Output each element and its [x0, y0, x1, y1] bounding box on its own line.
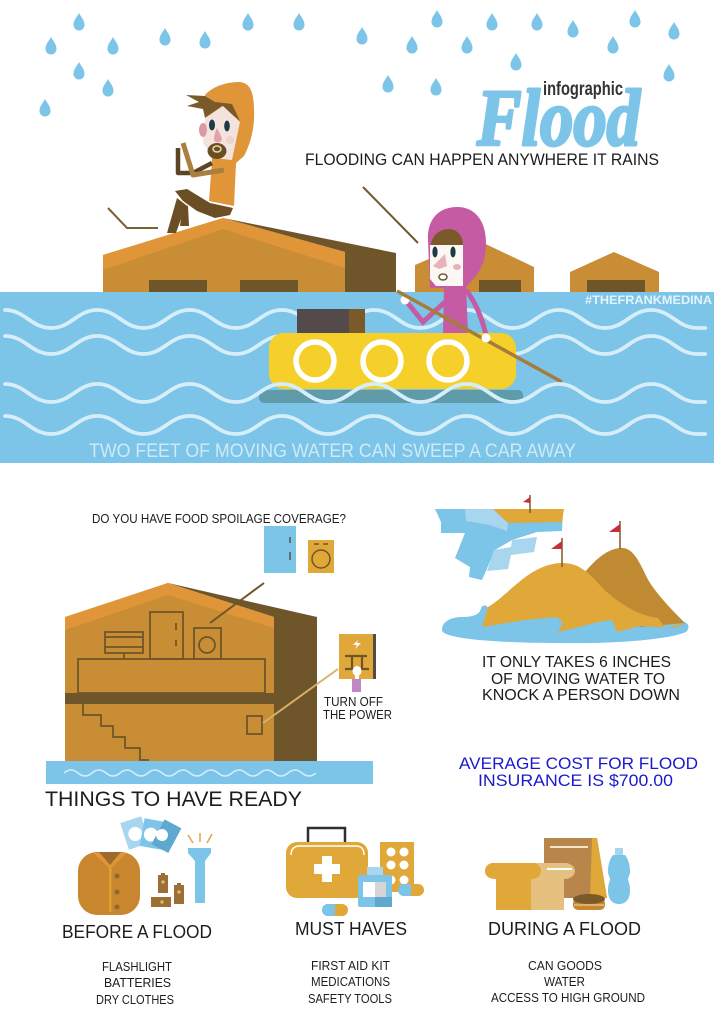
oar	[363, 187, 562, 382]
insurance cost callout	[459, 754, 698, 790]
during a flood list: WATER	[544, 975, 585, 989]
raft shadow	[259, 390, 523, 403]
man: dark arm	[178, 148, 212, 173]
six inches statement: IT ONLY TAKES 6 INCHES	[482, 654, 671, 671]
before a flood heading: BEFORE A FLOOD	[62, 922, 212, 942]
must haves list: FIRST AID KIT	[311, 959, 390, 973]
icon: paper bag	[544, 838, 607, 898]
during a flood list	[491, 959, 645, 1005]
icon: pill pack	[380, 842, 414, 892]
icon: flashlight	[188, 833, 212, 903]
girl: mouth	[439, 274, 447, 280]
small house right	[570, 252, 659, 292]
food spoilage question: DO YOU HAVE FOOD SPOILAGE COVERAGE?	[92, 512, 346, 526]
raindrops	[40, 10, 680, 116]
icon: medicine bottle	[358, 867, 392, 907]
must haves list: SAFETY TOOLS	[308, 992, 392, 1006]
icon: fridge	[264, 526, 296, 573]
icon: washer	[308, 540, 334, 573]
insurance cost callout: INSURANCE IS $700.00	[478, 771, 673, 790]
icon: first aid kit	[286, 828, 368, 898]
must haves heading: MUST HAVES	[295, 919, 407, 939]
turn off the power label	[323, 695, 392, 722]
hashtag: #THEFRANKMEDINA	[585, 293, 712, 307]
before a flood list: BATTERIES	[104, 976, 171, 990]
during a flood list: CAN GOODS	[528, 959, 602, 973]
man: eyes	[209, 120, 230, 132]
hills with flags	[482, 521, 685, 632]
title: infographic: infographic	[543, 79, 623, 100]
house cross-section	[65, 583, 317, 761]
things to have ready heading: THINGS TO HAVE READY	[45, 788, 302, 811]
girl: left hand	[400, 296, 410, 304]
must haves list: MEDICATIONS	[311, 975, 390, 989]
six inches statement: KNOCK A PERSON DOWN	[482, 687, 680, 704]
water caption: TWO FEET OF MOVING WATER CAN SWEEP A CAR AWAY	[89, 441, 576, 462]
man: body and hood	[205, 82, 254, 206]
water under house	[46, 761, 373, 784]
turn off the power label: TURN OFF	[324, 695, 383, 709]
insurance cost callout: AVERAGE COST FOR FLOOD	[459, 754, 698, 773]
during a flood heading: DURING A FLOOD	[488, 919, 641, 939]
man: face	[203, 106, 240, 160]
man: legs	[167, 189, 233, 233]
water band	[0, 292, 714, 463]
man: nose	[214, 128, 222, 142]
girl: face	[430, 245, 463, 286]
must haves list	[308, 959, 392, 1006]
man: hair	[186, 95, 240, 121]
cliff with flag	[435, 495, 564, 580]
girl in raft	[400, 207, 486, 335]
six inches statement: OF MOVING WATER TO	[491, 671, 665, 688]
before a flood list: FLASHLIGHT	[102, 960, 172, 974]
girl: nose and cheeks	[433, 254, 461, 270]
girl: body	[443, 285, 468, 333]
waves in front of raft	[5, 384, 705, 434]
turn off the power label: THE POWER	[323, 708, 392, 722]
icon: power breaker	[339, 634, 376, 692]
man: light arm	[183, 143, 224, 175]
during a flood list: ACCESS TO HIGH GROUND	[491, 991, 645, 1005]
girl: hood	[428, 207, 486, 288]
man on the roof	[167, 82, 254, 233]
icon: can	[573, 894, 605, 910]
icon: jacket	[78, 852, 140, 915]
title: Flood: Flood	[476, 75, 641, 163]
icon: bread loaves	[485, 863, 575, 910]
before a flood list	[96, 960, 174, 1007]
six inches statement	[482, 654, 680, 704]
girl: hair	[431, 229, 463, 245]
small house middle	[415, 239, 534, 292]
cargo box	[297, 309, 365, 333]
girl: eyes	[432, 246, 456, 258]
flags	[551, 521, 620, 567]
subtitle: FLOODING CAN HAPPEN ANYWHERE IT RAINS	[305, 151, 659, 169]
man: ear	[199, 123, 207, 137]
icon: photo cards	[120, 816, 181, 853]
girl: arms	[407, 290, 486, 335]
breaker pointer	[263, 669, 338, 723]
large house on left	[103, 218, 396, 292]
title	[476, 75, 641, 163]
roof antenna line	[108, 208, 158, 228]
before a flood list: DRY CLOTHES	[96, 993, 174, 1007]
water pool	[442, 605, 688, 643]
front hill	[482, 563, 685, 632]
back hill	[585, 548, 685, 627]
icon: capsules	[322, 884, 424, 916]
icon: water bottle	[608, 848, 630, 904]
man: beard	[208, 143, 226, 159]
man: cheek	[226, 136, 234, 144]
raft	[269, 333, 516, 389]
icon: batteries	[151, 873, 184, 907]
waves behind raft	[5, 310, 705, 354]
